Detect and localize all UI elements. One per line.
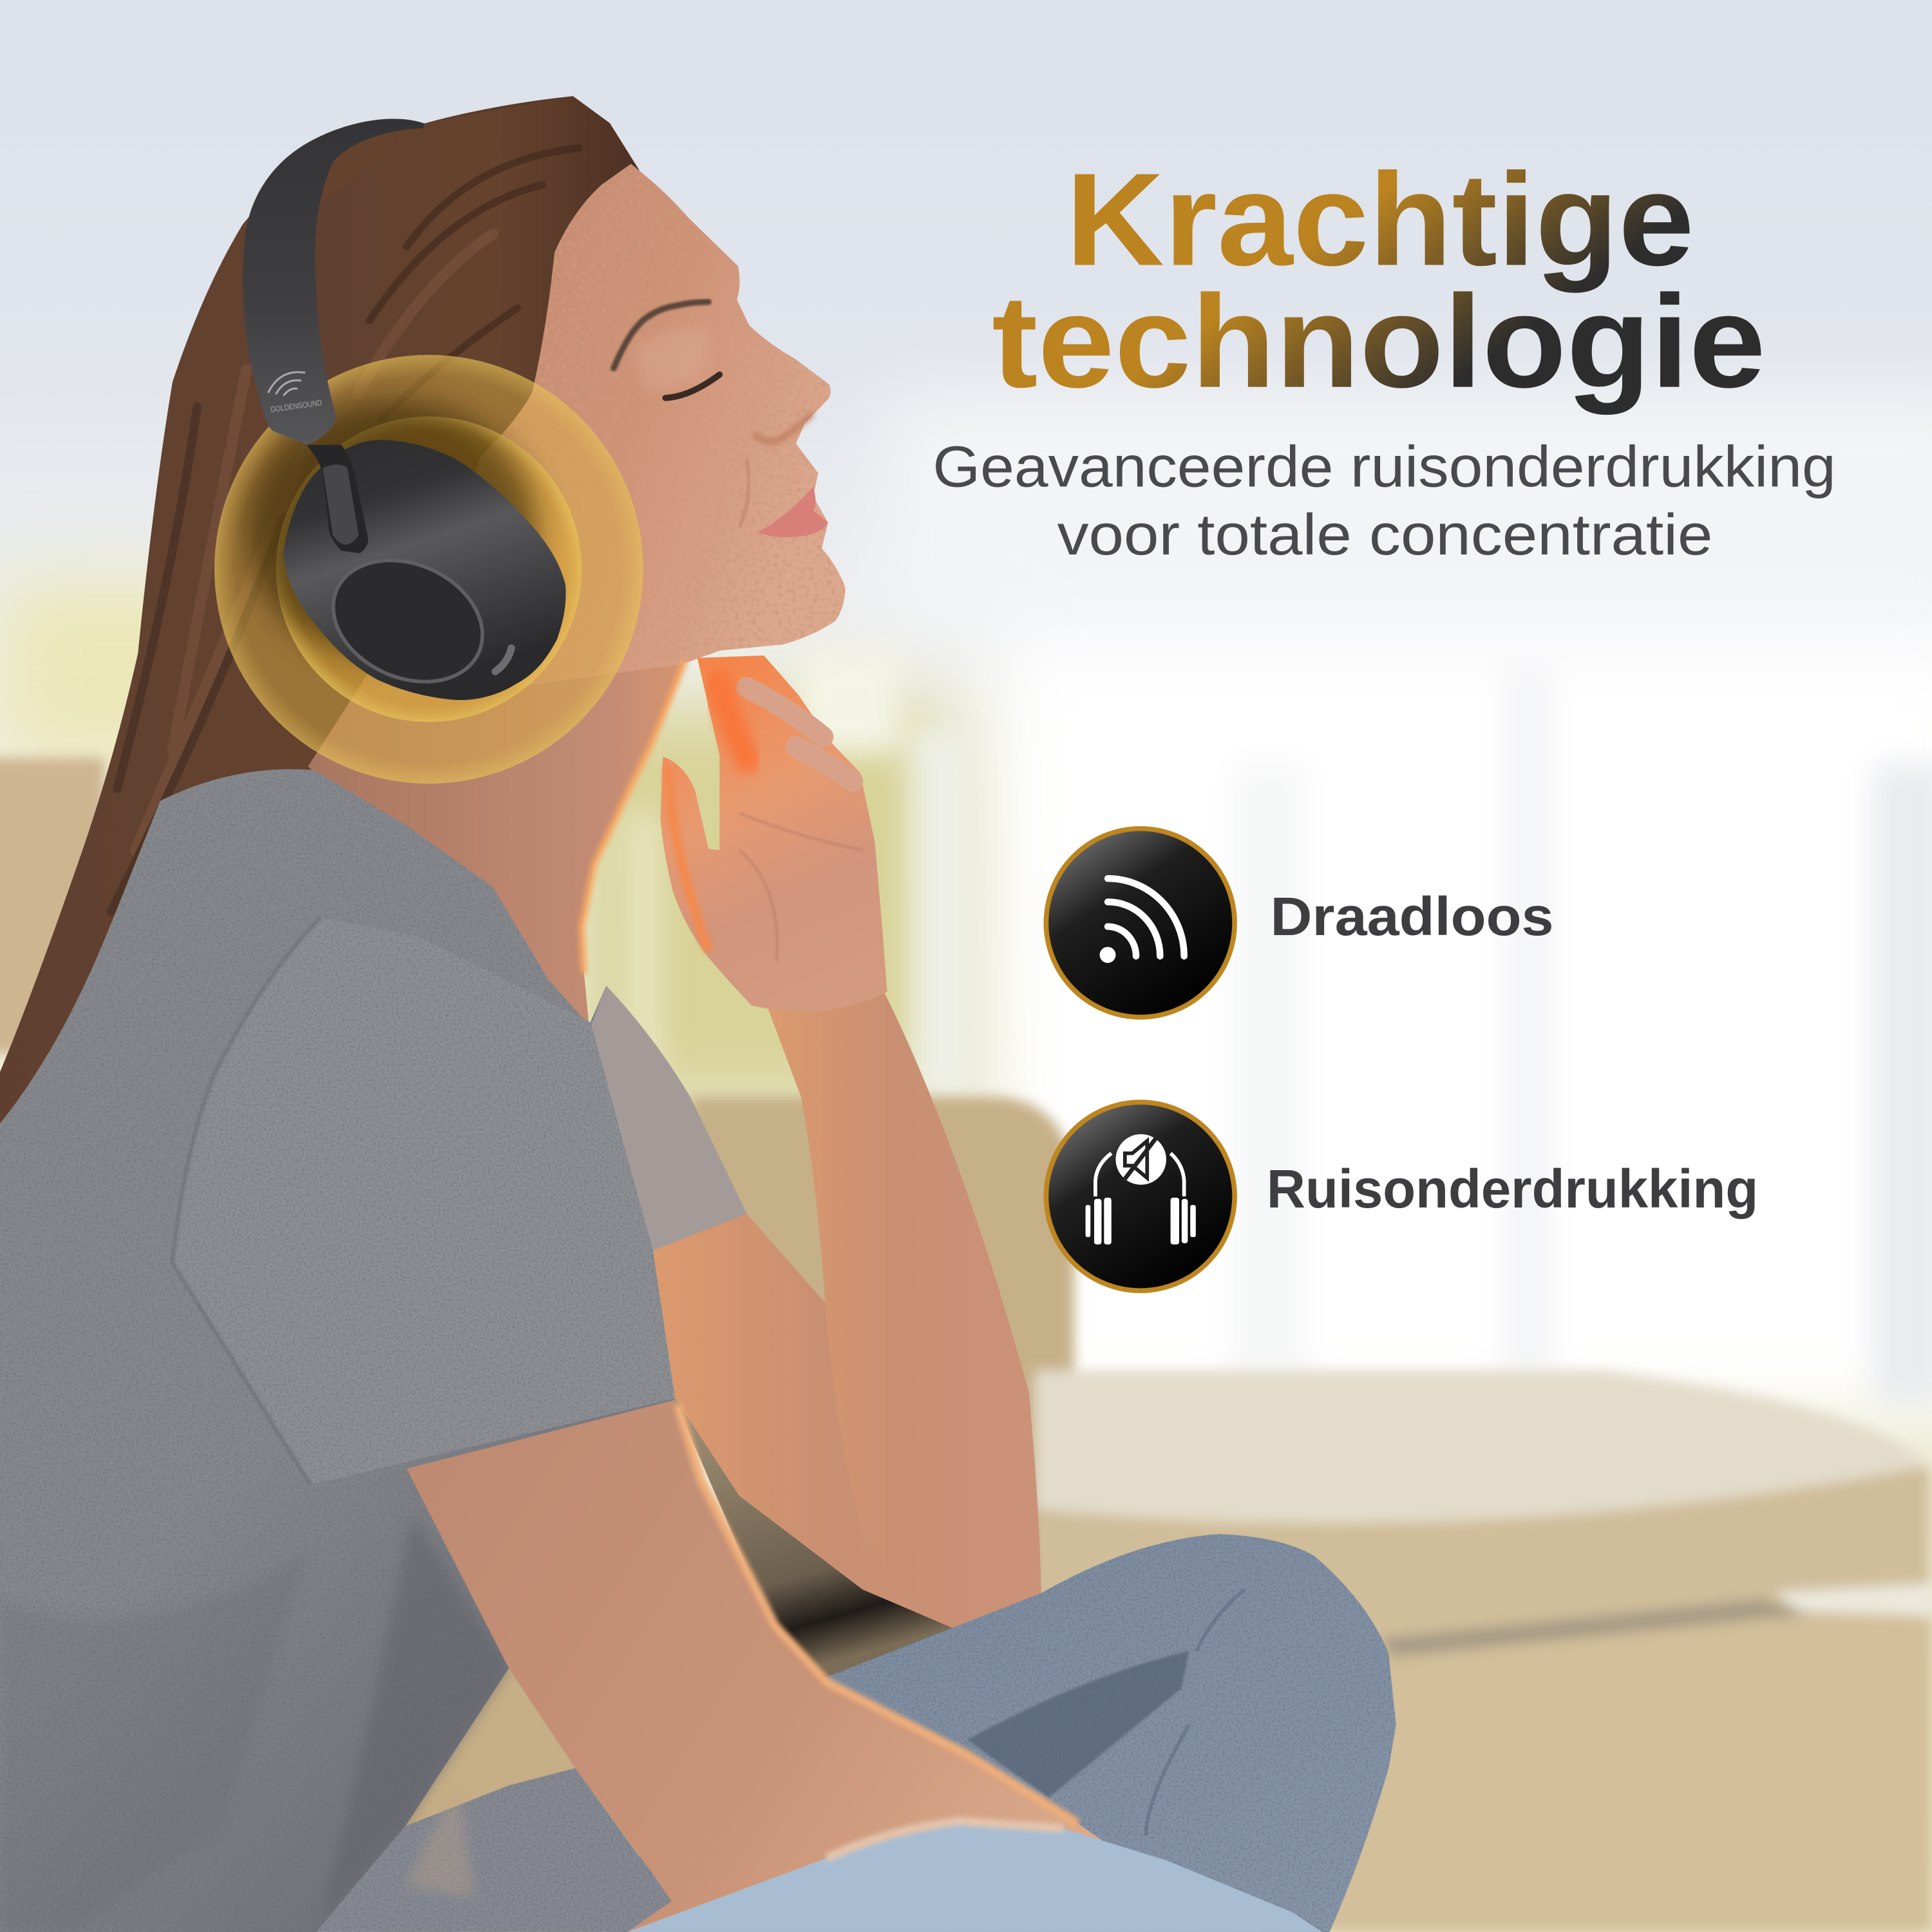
subtitle: Geavanceerde ruisonderdrukking [933,435,1836,500]
headband logo [266,369,323,414]
headphones with sound waves [214,118,643,784]
earcup [283,440,566,700]
jeans inner fold [967,1651,1189,1797]
light jeans foreground [627,1821,1322,1932]
sound wave: outer ring [214,355,643,784]
t-shirt [0,769,746,1932]
sound wave: inner ring [276,417,582,722]
hinge [307,445,368,553]
icon: headphones with muted speaker [1046,1102,1235,1291]
headband logo: GOLDENSOUND [270,398,323,414]
headband [243,118,424,445]
cup shadow [247,401,537,659]
subtitle [933,435,1836,567]
sunlit shirt back [591,986,746,1251]
face [468,164,845,690]
label: Ruisonderdrukking [1267,1159,1758,1219]
title: Krachtige [1066,146,1694,293]
feature: wireless [1046,829,1554,1017]
icon: wifi signal badge [1046,829,1235,1017]
facial features [614,302,828,537]
subtitle: voor totale concentratie [1057,503,1712,567]
woman with eyes closed [0,96,1396,1932]
title [992,146,1766,415]
near leg jeans [317,1768,672,1932]
fingers [746,688,853,781]
neck rim light [582,661,685,973]
forearm [766,988,1041,1638]
title: technologie [992,269,1766,415]
far arm [653,1214,1041,1638]
near arm [406,1399,1232,1932]
wedge shadow between arms [672,1392,974,1682]
sleeve [173,918,675,1484]
neck [308,493,739,1047]
label: Draadloos [1271,886,1554,947]
long hair behind [0,96,641,1124]
feature: noise cancelling [1046,1102,1758,1291]
hair over temple [296,96,631,493]
knee jeans [616,1534,1396,1932]
hand [661,656,887,1012]
earcup button [495,648,511,672]
hair strands [111,148,579,912]
earcup disc [314,538,502,705]
shirt lower folds [0,1515,509,1932]
